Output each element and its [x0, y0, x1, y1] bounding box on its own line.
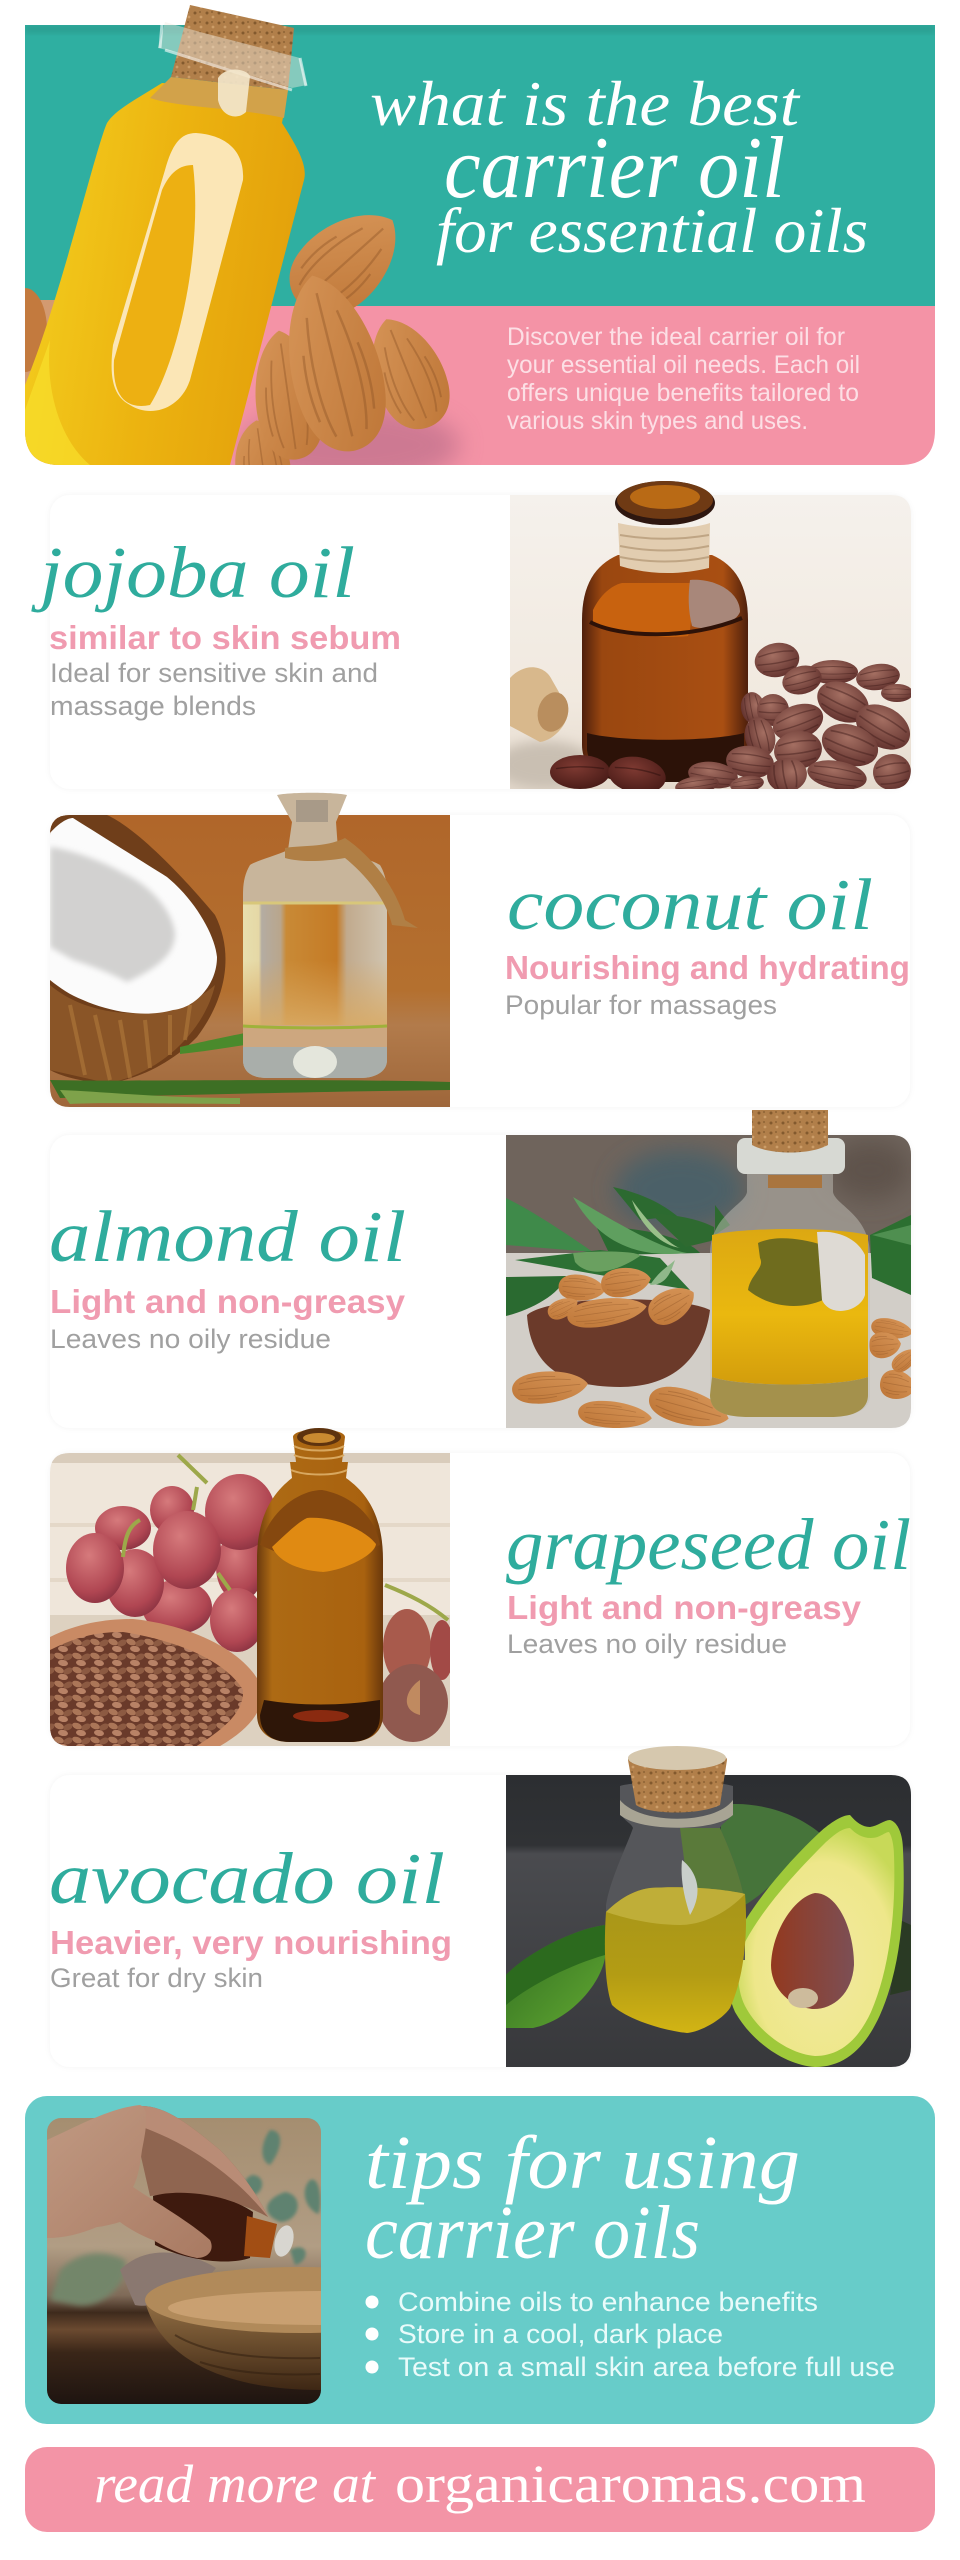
bullet list: Combine oils to enhance benefits — [398, 2287, 818, 2317]
icon: wooden bowl with almonds — [527, 1264, 710, 1387]
heading: tips for using carrier oils: carrier oils — [365, 2191, 700, 2275]
description: Popular for massages — [505, 990, 777, 1020]
call to action: organicaromas.com — [395, 2454, 866, 2514]
subheading: Light and non-greasy — [50, 1283, 406, 1320]
icon: coconut oil bottle — [243, 793, 418, 1078]
icon: jojoba nuts — [550, 639, 918, 798]
description: Leaves no oily residue — [50, 1324, 331, 1354]
heading: what is the best carrier oil for essential oils: what is the best — [370, 68, 801, 139]
heading: coconut oil: coconut oil — [507, 864, 873, 945]
card background — [50, 1775, 911, 2067]
description: massage blends — [50, 691, 256, 721]
icon: halved avocado — [728, 1815, 904, 2067]
heading: what is the best carrier oil for essential oils — [370, 68, 868, 266]
card background — [50, 1453, 910, 1746]
icon: golden oil bottle — [25, 5, 307, 465]
description: Leaves no oily residue — [507, 1629, 787, 1659]
icon: wooden bowl — [145, 2267, 472, 2390]
icon: avocado oil bottle — [605, 1746, 746, 2033]
description: Ideal for sensitive skin and — [50, 658, 378, 688]
panel: tips for using carrier oils — [25, 2096, 935, 2424]
photo: almond background — [506, 1135, 922, 1435]
call to action — [94, 2454, 866, 2514]
photo: jojoba background — [495, 495, 911, 789]
icon: dropper bottle — [153, 2193, 297, 2262]
icon: palm and thumb — [47, 2105, 212, 2258]
heading: almond oil: almond oil — [49, 1196, 406, 1277]
intro paragraph — [507, 323, 860, 435]
photo: coconut background — [50, 815, 450, 1107]
footer banner — [25, 2447, 935, 2532]
heading: tips for using carrier oils: tips for using — [365, 2121, 800, 2205]
panel background — [25, 2096, 935, 2424]
heading: grapeseed oil: grapeseed oil — [506, 1504, 911, 1585]
icon: hand fingers behind bottle — [135, 2106, 268, 2217]
icon: green leaf — [506, 1925, 605, 2028]
intro paragraph: offers unique benefits tailored to — [507, 379, 859, 407]
subheading: Light and non-greasy — [507, 1589, 862, 1626]
leaves — [50, 1033, 450, 1104]
panel: jojoba oil — [31, 481, 918, 798]
intro paragraph: Discover the ideal carrier oil for — [507, 323, 845, 351]
description: Great for dry skin — [50, 1963, 263, 1993]
panel: avocado oil — [49, 1746, 911, 2067]
header teal band — [25, 25, 935, 307]
bullet list: Test on a small skin area before full use — [398, 2352, 895, 2382]
leaves — [506, 1187, 911, 1316]
heading: tips for using carrier oils — [365, 2121, 800, 2275]
icon: almond oil bottle — [710, 1110, 870, 1417]
heading: jojoba oil: jojoba oil — [31, 532, 355, 613]
subheading: Nourishing and hydrating — [505, 949, 910, 986]
icon: grapes — [66, 1474, 454, 1742]
header panel — [3, 5, 935, 503]
panel: coconut oil — [50, 793, 910, 1107]
heading: what is the best carrier oil for essential oils: carrier oil — [444, 120, 785, 217]
photo: grapeseed background — [50, 1453, 454, 1750]
subheading: similar to skin sebum — [49, 619, 401, 656]
subheading: Heavier, very nourishing — [50, 1924, 452, 1961]
intro paragraph: various skin types and uses. — [507, 407, 808, 435]
heading: avocado oil: avocado oil — [49, 1838, 445, 1919]
icon: cork — [510, 667, 573, 742]
card background — [50, 1135, 911, 1428]
bullet list: Store in a cool, dark place — [398, 2319, 723, 2349]
card background — [50, 815, 910, 1107]
icon: grapeseed amber bottle — [257, 1428, 383, 1742]
stems — [123, 1455, 448, 1620]
photo: hand dropping oil into bowl — [47, 2105, 472, 2404]
icon: coconut half — [50, 815, 225, 1083]
panel: grapeseed oil — [50, 1428, 911, 1750]
icon: amber jojoba bottle — [582, 481, 748, 782]
panel: almond oil — [49, 1110, 922, 1435]
icon: almonds — [3, 190, 462, 503]
icon: loose almonds — [511, 1316, 922, 1435]
header pink band — [25, 300, 935, 465]
card background — [50, 495, 911, 789]
call to action: read more at — [94, 2454, 377, 2514]
icon: bowl of seeds — [50, 1619, 262, 1750]
heading: what is the best carrier oil for essential oils: for essential oils — [436, 195, 868, 266]
banner background — [25, 2447, 935, 2532]
intro paragraph: your essential oil needs. Each oil — [507, 351, 860, 379]
bullet list — [366, 2287, 895, 2382]
description — [50, 658, 378, 721]
photo: avocado background — [506, 1775, 911, 2067]
icon: whole avocado — [720, 1804, 822, 1905]
